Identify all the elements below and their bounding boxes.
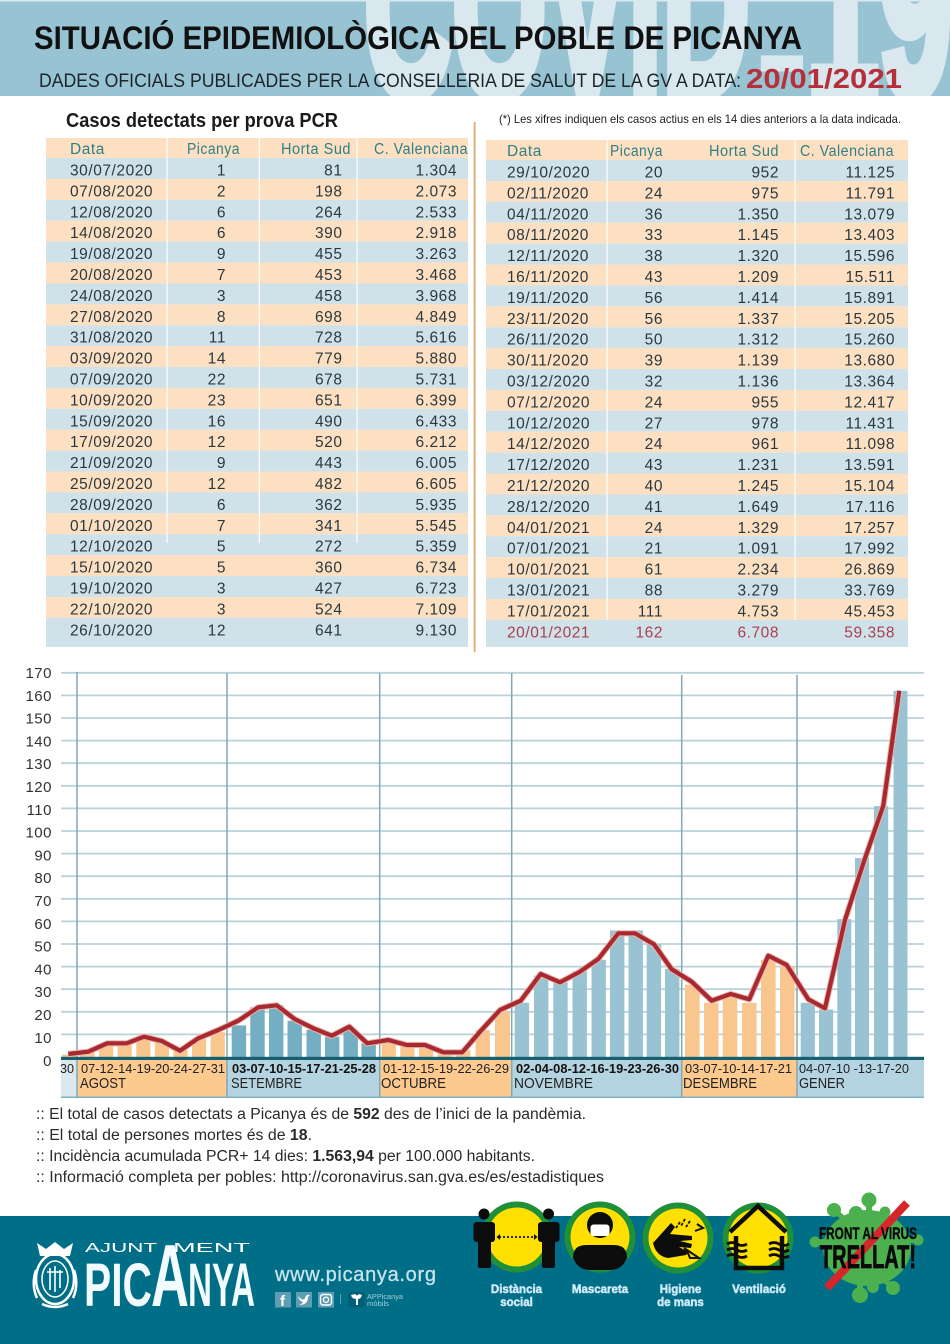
right table header: Horta Sud — [709, 143, 779, 160]
left table rows: 10/09/2020 — [70, 392, 153, 409]
left table rows: 5 — [217, 560, 226, 577]
y axis labels: 60 — [34, 916, 52, 933]
left table rows: 9.130 — [415, 622, 457, 639]
left table rows: 15/09/2020 — [70, 413, 153, 430]
right table rows: 30/11/2020 — [507, 353, 589, 370]
right table rows: 16/11/2020 — [507, 269, 589, 286]
left table rows: 3.968 — [415, 288, 457, 305]
bars: September — [232, 1005, 376, 1057]
safety icon captions: de mans — [657, 1297, 704, 1309]
safety icon captions: social — [500, 1297, 533, 1309]
left table rows: 23 — [208, 392, 226, 409]
footer band — [0, 1216, 950, 1344]
right table rows: 59.358 — [844, 624, 895, 641]
right table rows: 21/12/2020 — [507, 478, 590, 495]
left table rows: 651 — [315, 392, 342, 409]
left table rows: 6 — [217, 225, 226, 242]
right table rows: 1.209 — [737, 269, 779, 286]
left table rows: 1 — [217, 162, 226, 180]
right table rows: 24 — [645, 394, 663, 411]
left table header — [46, 138, 468, 158]
right table rows: 07/01/2021 — [507, 541, 590, 558]
social icons: f — [280, 1293, 286, 1310]
right table rows: 56 — [645, 290, 663, 307]
right table rows: 20 — [645, 164, 663, 182]
right table rows: 952 — [751, 164, 779, 182]
left table rows: 12 — [208, 476, 226, 493]
right table rows: 41 — [645, 499, 663, 516]
left table rows: 6.212 — [415, 434, 457, 451]
left table rows: 678 — [315, 372, 342, 388]
right table rows: 02/11/2020 — [507, 185, 589, 202]
right table rows: 27 — [645, 415, 663, 432]
notes block — [36, 1106, 604, 1186]
axis baseline — [61, 1057, 924, 1060]
right table rows: 1.312 — [737, 332, 779, 349]
left table header: C. Valenciana — [374, 141, 468, 158]
right table rows: 11.098 — [845, 436, 895, 453]
right table rows: 07/12/2020 — [507, 394, 590, 411]
left table rows: 7.109 — [415, 601, 457, 618]
left table rows: 20/08/2020 — [70, 267, 153, 284]
y axis labels: 120 — [25, 779, 52, 796]
left table rows: 5.880 — [415, 351, 457, 368]
y axis labels: 150 — [25, 711, 52, 728]
bars: November — [515, 930, 679, 1057]
footnote: (*) Les xifres indiquen els casos actius en els 14 dies anteriors a la data indicada. — [499, 112, 901, 126]
left table rows: 2.533 — [415, 204, 457, 221]
left table rows: 360 — [315, 560, 342, 577]
right table rows: 13.680 — [844, 353, 895, 370]
y axis labels: 40 — [34, 961, 52, 978]
right table rows: 38 — [645, 248, 663, 265]
left table rows: 01/10/2020 — [70, 518, 153, 535]
left table rows: 16 — [208, 413, 226, 430]
safety icon captions: Mascareta — [572, 1284, 629, 1296]
right table rows: 61 — [645, 562, 663, 579]
logo: Ajuntament de Picanya: NYA — [188, 1251, 255, 1319]
left table rows: 2.073 — [415, 183, 457, 200]
left table rows: 5.731 — [415, 372, 457, 388]
month names: OCTUBRE — [381, 1075, 446, 1092]
right table rows: 33.769 — [844, 582, 895, 600]
x axis date labels: 30 — [60, 1062, 74, 1076]
left table rows: 12/10/2020 — [70, 539, 153, 556]
left table rows: 3.263 — [415, 246, 457, 263]
left table rows: 3 — [217, 601, 226, 618]
left table rows: 390 — [315, 225, 342, 242]
social icons: APPicanya — [367, 1292, 404, 1301]
right table rows: 15.260 — [844, 332, 895, 349]
right table rows: 1.649 — [737, 499, 779, 516]
left table rows: 12 — [208, 622, 226, 639]
right table rows: 08/11/2020 — [507, 227, 589, 244]
icon: red slash — [827, 1203, 907, 1288]
safety icon captions: Higiene — [660, 1284, 701, 1296]
left table rows: 6.005 — [415, 455, 457, 472]
right table header — [486, 140, 908, 160]
left table rows: 6 — [217, 204, 226, 221]
y axis labels: 160 — [25, 688, 52, 705]
right table header: Picanya — [610, 143, 663, 160]
x axis date labels: 03-07-10-14-17-21 — [685, 1062, 792, 1076]
y axis labels: 130 — [25, 756, 52, 773]
left table rows: 07/09/2020 — [70, 372, 153, 388]
left table rows: 5.616 — [415, 330, 457, 347]
right table rows: 36 — [645, 206, 663, 223]
right table rows: 1.139 — [737, 353, 779, 370]
y axis labels: 140 — [25, 733, 52, 750]
bars: December — [685, 960, 795, 1057]
left table rows: 15/10/2020 — [70, 560, 153, 577]
left table rows: 728 — [315, 330, 342, 347]
x axis date labels: 01-12-15-19-22-26-29 — [383, 1062, 509, 1076]
month names: AGOST — [80, 1075, 126, 1092]
right table rows: 19/11/2020 — [507, 290, 589, 307]
right table rows: 32 — [645, 374, 663, 390]
left table rows: 698 — [315, 309, 342, 326]
header banner — [0, 0, 950, 96]
left table rows: 3 — [217, 288, 226, 305]
month names: SETEMBRE — [231, 1075, 302, 1092]
left table header: Horta Sud — [281, 141, 351, 158]
y axis labels: 10 — [34, 1030, 52, 1047]
panel: right table — [486, 140, 908, 647]
right table rows: 12/11/2020 — [507, 248, 589, 265]
icon: social distance — [474, 1202, 560, 1272]
x axis date labels: 04-07-10 -13-17-20 — [799, 1062, 909, 1076]
divider between tables — [474, 122, 476, 652]
left table rows: 11 — [209, 330, 226, 347]
logo: Ajuntament de Picanya: A — [151, 1226, 189, 1325]
left table rows: 81 — [324, 162, 342, 180]
right table rows: 28/12/2020 — [507, 499, 590, 516]
social icons: mòbils — [367, 1299, 389, 1308]
icon: ventilation — [722, 1202, 794, 1274]
right table rows: 20/01/2021 — [507, 624, 590, 641]
trend line — [68, 691, 899, 1054]
right table rows: 17/01/2021 — [507, 603, 590, 620]
left table rows: 490 — [315, 413, 342, 430]
right table header: C. Valenciana — [800, 143, 894, 160]
left table rows: 24/08/2020 — [70, 288, 153, 305]
y axis labels: 30 — [34, 984, 52, 1001]
panel: left table — [46, 138, 468, 647]
left table rows: 455 — [315, 246, 342, 263]
safety icon captions: Distància — [491, 1284, 543, 1296]
icon: face mask — [564, 1202, 636, 1272]
left table rows: 12/08/2020 — [70, 204, 153, 221]
right table rows: 1.145 — [737, 227, 779, 244]
right table rows: 6.708 — [737, 624, 779, 641]
right table rows: 17.992 — [844, 541, 895, 558]
right table rows: 15.891 — [844, 290, 895, 307]
right table rows: 975 — [751, 185, 779, 202]
report date: 20/01/2021 — [746, 63, 902, 94]
month names: NOVEMBRE — [514, 1075, 593, 1092]
y axis labels: 80 — [34, 870, 52, 887]
right table rows: 24 — [645, 520, 663, 537]
right table rows: 1.320 — [737, 248, 779, 265]
right table rows: 23/11/2020 — [507, 311, 589, 328]
logo: Ajuntament de Picanya: AJUNT — [85, 1240, 157, 1255]
right table rows: 26/11/2020 — [507, 332, 589, 349]
icon: hand hygiene — [642, 1202, 714, 1274]
left table rows: 3.468 — [415, 267, 457, 284]
right table rows: 10/12/2020 — [507, 415, 590, 432]
y axis labels: 110 — [27, 802, 52, 819]
right table rows: 1.136 — [737, 374, 779, 390]
right table header: Data — [507, 143, 542, 160]
right table rows: 40 — [645, 478, 663, 495]
left table rows: 524 — [315, 601, 342, 618]
left table rows: 5.935 — [415, 497, 457, 514]
left table rows: 14 — [208, 351, 226, 368]
safety icon captions — [491, 1284, 786, 1309]
left table rows: 12 — [208, 434, 226, 451]
left table rows: 2.918 — [415, 225, 457, 242]
right table rows: 13.403 — [844, 227, 895, 244]
icon: crossed-out virus badge — [810, 1192, 924, 1303]
right table rows: 12.417 — [844, 394, 895, 411]
icon: town crest — [34, 1242, 76, 1307]
right table rows: 2.234 — [737, 562, 779, 579]
right table rows: 04/01/2021 — [507, 520, 590, 537]
left table rows: 9 — [217, 455, 226, 472]
right table rows: 13.079 — [844, 206, 895, 223]
left table rows: 22 — [208, 372, 226, 388]
right table rows: 162 — [635, 624, 663, 641]
social icons — [275, 1292, 404, 1310]
y axis labels: 20 — [34, 1007, 52, 1024]
x axis date labels: 03-07-10-15-17-21-25-28 — [232, 1062, 376, 1076]
y axis labels: 70 — [34, 893, 52, 910]
right table rows: 17.257 — [844, 520, 895, 537]
right table rows: 03/12/2020 — [507, 374, 590, 390]
right table rows: 1.350 — [737, 206, 779, 223]
right table rows: 978 — [751, 415, 779, 432]
logo: Ajuntament de Picanya: PIC — [84, 1251, 152, 1319]
left table rows: 362 — [315, 497, 342, 514]
right table rows: 4.753 — [737, 603, 779, 620]
notes block: :: El total de casos detectats a Picanya és de 592 des de l’inici de la pandèmia. — [36, 1106, 586, 1123]
notes block: :: Incidència acumulada PCR+ 14 dies: 1.563,94 per 100.000 habitants. — [36, 1148, 535, 1165]
left table rows: 453 — [315, 267, 342, 284]
left table rows: 07/08/2020 — [70, 183, 153, 200]
right table rows: 50 — [645, 332, 663, 349]
month names — [80, 1075, 845, 1092]
month names: DESEMBRE — [683, 1075, 757, 1092]
left table rows: 21/09/2020 — [70, 455, 153, 472]
right table rows: 56 — [645, 311, 663, 328]
right table rows: 15.596 — [844, 248, 895, 265]
right table rows: 1.329 — [737, 520, 779, 537]
right table rows: 955 — [751, 394, 779, 411]
left table rows: 443 — [315, 455, 342, 472]
left table rows: 198 — [315, 183, 342, 200]
x axis date labels — [60, 1062, 909, 1076]
left table rows: 14/08/2020 — [70, 225, 153, 242]
left table header: Data — [70, 141, 105, 158]
left table rows: 6.433 — [415, 413, 457, 430]
watermark: COVID-19 — [366, 2, 950, 96]
x axis date labels: 02-04-08-12-16-19-23-26-30 — [516, 1062, 679, 1076]
right table rows: 11.125 — [845, 164, 895, 182]
left table rows: 17/09/2020 — [70, 434, 153, 451]
left table header: Picanya — [187, 141, 240, 158]
left table rows: 6.605 — [415, 476, 457, 493]
logo: Ajuntament de Picanya: MENT — [173, 1240, 250, 1255]
left table rows: 341 — [315, 518, 342, 535]
left table rows: 3 — [217, 580, 226, 598]
left table rows: 458 — [315, 288, 342, 305]
table heading: Casos detectats per prova PCR — [66, 110, 338, 132]
right table rows: 1.337 — [737, 311, 779, 328]
month bands under the axis — [61, 1058, 924, 1098]
right table rows: 15.511 — [845, 269, 895, 286]
right table rows: 17.116 — [845, 499, 895, 516]
right table rows: 29/10/2020 — [507, 164, 590, 182]
website: www.picanya.org — [274, 1264, 436, 1286]
left table rows: 25/09/2020 — [70, 476, 153, 493]
right table rows: 88 — [645, 582, 663, 600]
y axis labels: 100 — [25, 825, 52, 842]
notes block: :: Informació completa per pobles: http://coronavirus.san.gva.es/es/estadistiques — [36, 1169, 604, 1186]
safety icon captions: Ventilació — [732, 1284, 786, 1296]
right table rows — [486, 160, 908, 647]
left table rows: 641 — [315, 622, 342, 639]
right table rows: 26.869 — [844, 562, 895, 579]
bars: October — [382, 1012, 510, 1057]
left table rows: 31/08/2020 — [70, 330, 153, 347]
left table rows: 5.359 — [415, 539, 457, 556]
right table rows: 33 — [645, 227, 663, 244]
left table rows: 482 — [315, 476, 342, 493]
left table rows: 27/08/2020 — [70, 309, 153, 326]
right table rows: 15.205 — [844, 311, 895, 328]
right table rows: 11.431 — [845, 415, 895, 432]
left table rows: 1.304 — [415, 162, 457, 180]
x axis date labels: 07-12-14-19-20-24-27-31 — [81, 1062, 225, 1076]
left table rows: 4.849 — [415, 309, 457, 326]
left table rows: 8 — [217, 309, 226, 326]
left table rows: 7 — [217, 267, 226, 284]
y axis labels: 170 — [25, 665, 52, 682]
right table rows: 24 — [645, 436, 663, 453]
left table rows: 26/10/2020 — [70, 622, 153, 639]
left table rows: 264 — [315, 204, 342, 221]
left table rows: 6.399 — [415, 392, 457, 409]
right table rows: 17/12/2020 — [507, 457, 590, 474]
bars: July — [62, 1055, 76, 1057]
left table rows: 6 — [217, 497, 226, 514]
right table rows: 45.453 — [844, 603, 895, 620]
title: SITUACIÓ EPIDEMIOLÒGICA DEL POBLE DE PICANYA — [34, 20, 802, 56]
left table rows — [46, 158, 468, 647]
left table rows: 28/09/2020 — [70, 497, 153, 514]
left table rows: 427 — [315, 580, 342, 598]
left table rows: 2 — [217, 183, 226, 200]
right table rows: 1.245 — [737, 478, 779, 495]
right table rows: 24 — [645, 185, 663, 202]
right table rows: 11.791 — [845, 185, 895, 202]
right table rows: 43 — [645, 269, 663, 286]
right table rows: 04/11/2020 — [507, 206, 589, 223]
left table rows: 22/10/2020 — [70, 601, 153, 618]
left table rows: 6.734 — [415, 560, 457, 577]
right table rows: 13.591 — [844, 457, 895, 474]
right table rows: 1.231 — [737, 457, 779, 474]
right table rows: 961 — [751, 436, 779, 453]
left table rows: 7 — [217, 518, 226, 535]
y axis labels — [25, 665, 52, 1070]
left table rows: 30/07/2020 — [70, 162, 153, 180]
right table rows: 1.091 — [737, 541, 779, 558]
right table rows: 21 — [645, 541, 663, 558]
right table rows: 14/12/2020 — [507, 436, 590, 453]
y axis labels: 90 — [34, 847, 52, 864]
right table rows: 43 — [645, 457, 663, 474]
right table rows: 3.279 — [737, 582, 779, 600]
right table rows: 13/01/2021 — [507, 582, 590, 600]
month names: GENER — [799, 1075, 845, 1092]
logo: Ajuntament de Picanya — [34, 1226, 255, 1325]
right table rows: 13.364 — [844, 374, 895, 390]
notes block: :: El total de persones mortes és de 18. — [36, 1127, 312, 1144]
bars: August — [80, 1032, 225, 1057]
left table rows: 19/08/2020 — [70, 246, 153, 263]
right table rows: 15.104 — [844, 478, 895, 495]
y axis labels: 0 — [43, 1053, 52, 1070]
chart: active cases by date — [25, 665, 924, 1098]
y axis labels: 50 — [34, 939, 52, 956]
right table rows: 39 — [645, 353, 663, 370]
left table rows: 520 — [315, 434, 342, 451]
right table rows: 111 — [638, 603, 663, 620]
left table rows: 6.723 — [415, 580, 457, 598]
right table rows: 10/01/2021 — [507, 562, 590, 579]
subtitle: DADES OFICIALS PUBLICADES PER LA CONSELLERIA DE SALUT DE LA GV A DATA: — [39, 71, 741, 92]
left table rows: 272 — [315, 539, 342, 556]
left table rows: 19/10/2020 — [70, 580, 153, 598]
left table rows: 9 — [217, 246, 226, 263]
left table rows: 779 — [315, 351, 342, 368]
bars: January — [801, 691, 908, 1057]
left table rows: 03/09/2020 — [70, 351, 153, 368]
left table rows: 5 — [217, 539, 226, 556]
right table rows: 1.414 — [737, 290, 779, 307]
left table rows: 5.545 — [415, 518, 457, 535]
